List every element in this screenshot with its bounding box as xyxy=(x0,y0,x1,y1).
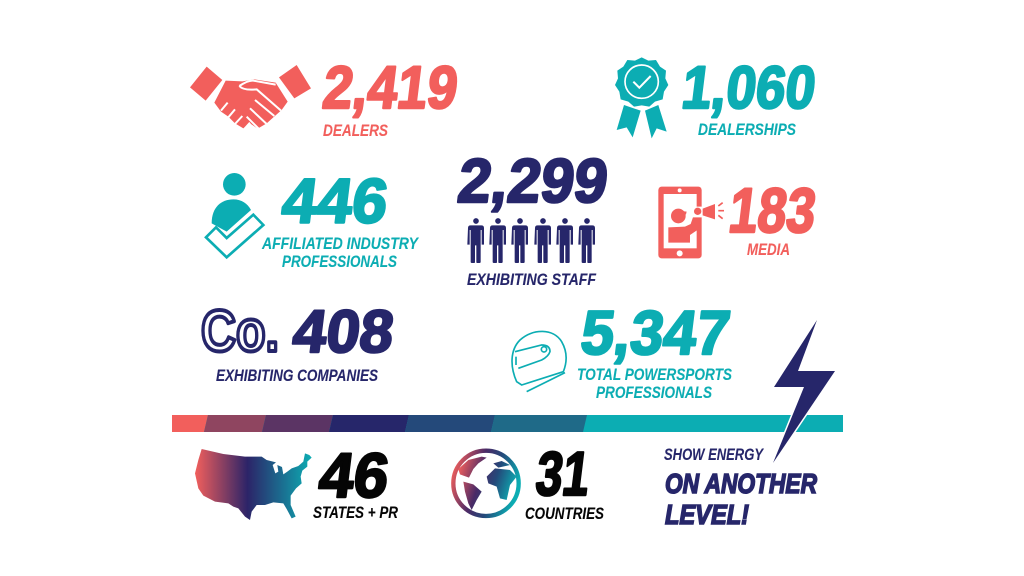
number: 1,060: 1,060 xyxy=(678,53,820,121)
icon: outlined Co. lettering: Co. xyxy=(201,299,279,364)
icon: handshake xyxy=(190,65,311,129)
stat: dealerships xyxy=(615,53,820,139)
stat: states xyxy=(195,441,398,522)
number: 2,419: 2,419 xyxy=(319,53,462,121)
number: 446: 446 xyxy=(278,167,392,236)
icon: lightning bolt xyxy=(773,320,835,463)
stat: exhibiting staff xyxy=(454,147,612,289)
label: professionals: PROFESSIONALS xyxy=(282,253,397,271)
icon: USA map xyxy=(195,449,312,520)
number: 5,347: 5,347 xyxy=(577,299,734,368)
number: 46: 46 xyxy=(315,441,393,511)
icon: globe xyxy=(453,451,519,516)
icon: award ribbon xyxy=(615,57,668,138)
text: show energy: SHOW ENERGY xyxy=(664,446,765,464)
label: states + PR: STATES + PR xyxy=(313,504,398,522)
label: total powersports: TOTAL POWERSPORTS xyxy=(577,366,732,384)
icon: six staff figures xyxy=(467,218,595,263)
number: 183: 183 xyxy=(725,176,820,246)
gradient stripe bar xyxy=(172,415,843,432)
label: exhibiting staff: EXHIBITING STAFF xyxy=(467,271,597,289)
icon: helmet xyxy=(512,331,566,392)
label: media: MEDIA xyxy=(747,241,790,259)
text: level!: LEVEL! xyxy=(665,499,749,530)
label: dealerships: DEALERSHIPS xyxy=(698,121,796,139)
stat: affiliated industry professionals xyxy=(206,167,420,271)
number: 2,299: 2,299 xyxy=(454,147,612,216)
number: 31: 31 xyxy=(532,440,594,509)
stat: countries xyxy=(453,440,604,523)
number: 408: 408 xyxy=(289,297,398,365)
icon: phone with megaphone xyxy=(658,187,724,258)
label: affiliated industry: AFFILIATED INDUSTRY xyxy=(261,235,420,253)
stat: dealers xyxy=(190,53,462,140)
label: dealers: DEALERS xyxy=(323,122,388,140)
text: on another: ON ANOTHER xyxy=(665,468,818,499)
tagline xyxy=(664,446,818,530)
label: countries: COUNTRIES xyxy=(525,505,604,523)
icon: person with check xyxy=(206,173,263,257)
stat: exhibiting companies xyxy=(201,297,398,385)
label: exhibiting companies: EXHIBITING COMPANIES xyxy=(216,367,378,385)
label: professionals: PROFESSIONALS xyxy=(596,384,712,402)
stat: total powersports professionals xyxy=(512,299,734,402)
stat: media xyxy=(658,176,820,259)
